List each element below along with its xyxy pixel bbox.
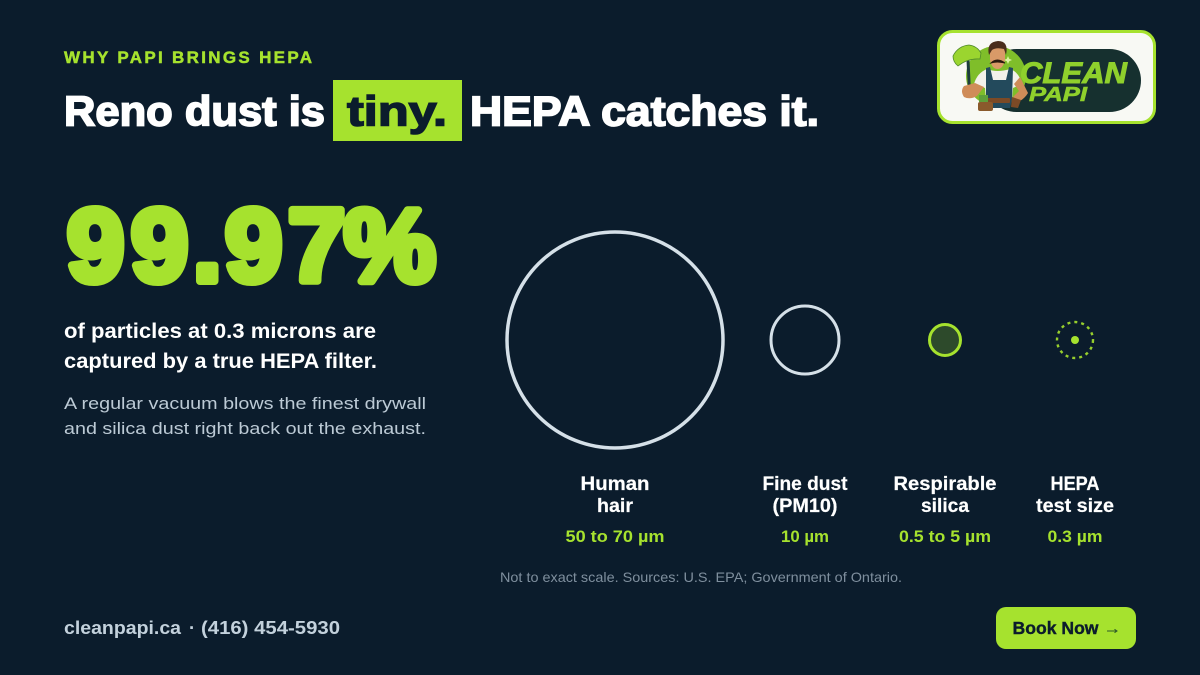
label: HEPA test size: test size [1036,496,1114,517]
label: respirable silica [894,474,996,546]
book now button [996,607,1136,649]
label: HEPA test size [1036,474,1114,546]
label: human hair: 50 to 70 µm [566,527,664,546]
label: respirable silica: silica [921,496,969,517]
label: fine dust: Fine dust [762,474,848,495]
title [64,80,819,141]
circle: respirable silica [930,324,960,356]
logo wordmark: PAPI [1029,84,1088,106]
big stat: 99.97% [67,188,436,303]
logo wordmark [1020,57,1128,106]
stat description: captured by a true HEPA filter. [64,350,377,373]
eyebrow: WHY PAPI BRINGS HEPA [64,48,312,67]
hair [988,41,1007,55]
label: fine dust [762,474,848,546]
circle: fine dust [771,306,839,374]
stat description [64,320,377,373]
particle: fine dust [762,306,848,546]
title: HEPA catches it. [470,88,819,134]
belt and tools [986,98,1010,103]
logo [938,32,1154,122]
circle: human hair [507,232,723,448]
supporting text: and silica dust right back out the exhaust. [64,419,426,438]
label: respirable silica: Respirable [894,474,996,495]
head [990,48,1005,69]
right arm [1013,77,1028,101]
label: human hair [566,474,664,546]
logo mascot [953,41,1028,111]
supporting text: A regular vacuum blows the finest drywall [64,394,426,413]
stat description: of particles at 0.3 microns are [64,320,376,343]
footer contact: (416) 454-5930 [201,617,340,638]
particle: human hair [507,232,723,546]
label: HEPA test size: 0.3 µm [1048,527,1102,546]
book now button: Book Now [1012,618,1099,638]
label: human hair: Human [580,474,650,495]
title: Reno dust is [64,88,325,134]
overalls [986,67,1013,108]
particle: HEPA test size [1036,322,1114,546]
label: respirable silica: 0.5 to 5 µm [899,527,991,546]
label: fine dust: (PM10) [772,496,838,517]
circle: HEPA test size [1057,322,1093,358]
footer contact [64,617,340,638]
broom [953,45,981,92]
source note: Not to exact scale. Sources: U.S. EPA; Government of Ontario. [500,569,902,585]
moustache [991,60,1005,63]
glove [1011,97,1021,108]
left arm [962,83,984,98]
logo wordmark: CLEAN [1020,57,1128,90]
particle: respirable silica [894,324,996,546]
label: human hair: hair [597,496,634,517]
footer contact: · [189,617,195,638]
title highlight: tiny [333,80,462,141]
title highlight: tiny: tiny. [347,88,447,134]
supporting text [64,394,426,438]
footer contact: cleanpapi.ca [64,617,182,638]
logo pill [985,49,1141,112]
shirt [974,69,1022,100]
arrow [1107,629,1117,633]
label: fine dust: 10 µm [781,527,829,546]
label: HEPA test size: HEPA [1050,474,1100,495]
